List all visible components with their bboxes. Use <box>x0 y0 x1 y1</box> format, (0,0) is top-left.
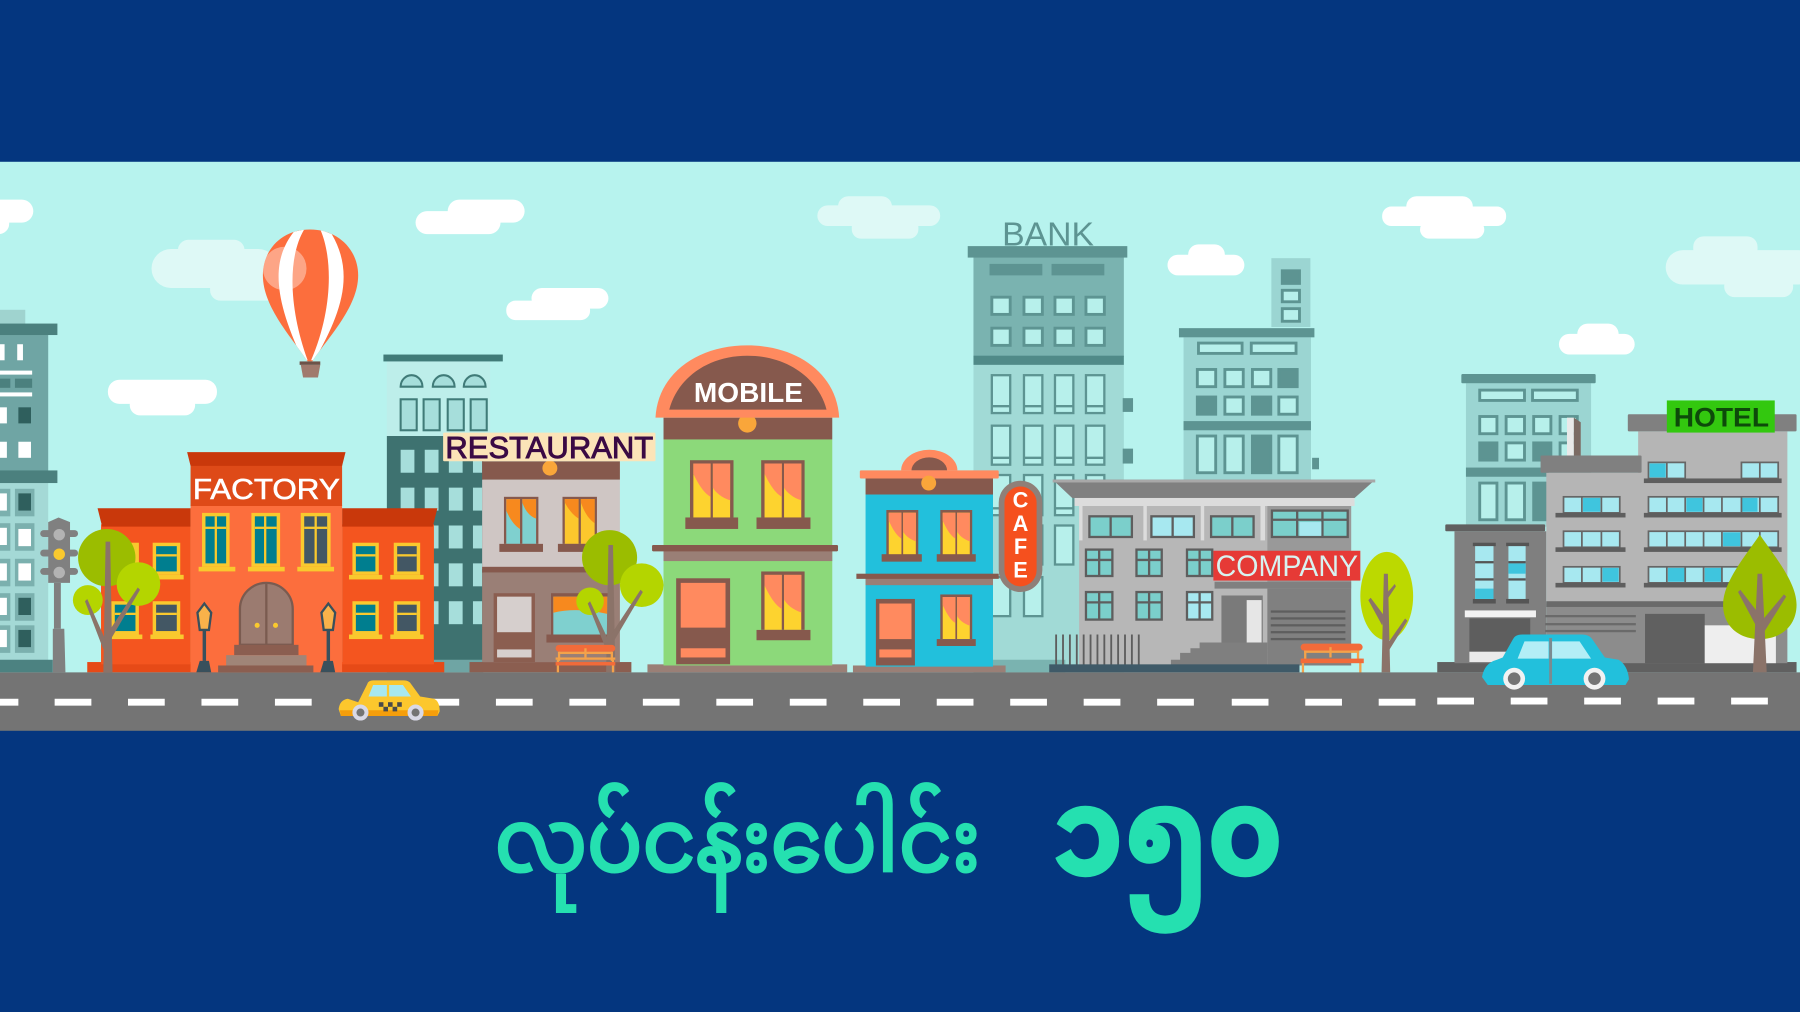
sky <box>0 162 1800 674</box>
bank sign: BANK <box>1002 217 1094 254</box>
top navy band <box>0 0 1800 162</box>
lime tree <box>1360 552 1413 672</box>
road <box>0 672 1800 731</box>
teal office building behind company <box>1179 258 1319 484</box>
bottom navy band <box>0 731 1800 1012</box>
factory building <box>87 452 444 672</box>
mobile shop building <box>647 345 847 672</box>
title words: လုပ်ငန်းပေါင်း <box>495 757 980 947</box>
hotel group buildings <box>1437 374 1797 672</box>
cafe windows <box>882 510 976 646</box>
traffic light <box>40 517 78 672</box>
blue car <box>1482 635 1629 690</box>
bench near company <box>1301 644 1364 677</box>
restaurant door and shop window <box>494 593 614 662</box>
factory street lamps <box>196 604 335 672</box>
restaurant sign: RESTAURANT <box>445 430 653 465</box>
yellow taxi <box>339 680 440 721</box>
mobile windows <box>685 460 810 640</box>
main hotel block <box>1541 414 1797 663</box>
hotel sign: HOTEL <box>1674 402 1769 432</box>
tree near factory <box>73 529 160 672</box>
bench near restaurant <box>556 645 615 676</box>
city scene panel <box>0 162 1800 731</box>
company sign: COMPANY <box>1216 550 1358 583</box>
hotel windows <box>1555 462 1782 587</box>
cafe building <box>853 450 1006 672</box>
low grey block <box>1437 524 1797 672</box>
rear teal building <box>1461 374 1596 527</box>
lane dashes <box>0 698 1768 706</box>
clouds <box>0 196 1800 415</box>
restaurant building <box>470 461 631 672</box>
hot air balloon <box>263 229 358 377</box>
cafe sign <box>999 481 1042 592</box>
mobile sign: MOBILE <box>694 377 803 408</box>
cafe sign: CAFE <box>1013 487 1029 583</box>
tree near restaurant <box>576 530 664 672</box>
bank tower <box>968 217 1133 672</box>
factory door and steps <box>218 583 313 672</box>
left teal tower <box>0 310 57 672</box>
company fence <box>1056 635 1139 665</box>
teardrop tree <box>1723 535 1797 672</box>
mobile door <box>676 578 730 664</box>
company windows <box>1086 511 1348 620</box>
title number: ၁၅၀ <box>1053 714 1282 978</box>
title: 150 businesses in Burmese <box>495 714 1282 978</box>
cafe door <box>876 599 915 665</box>
factory sign: FACTORY <box>193 474 340 506</box>
back dark teal building <box>383 355 503 672</box>
restaurant windows <box>499 497 603 552</box>
company entrance and shutter <box>1171 582 1351 665</box>
factory windows <box>109 513 424 639</box>
company building <box>1049 480 1375 672</box>
